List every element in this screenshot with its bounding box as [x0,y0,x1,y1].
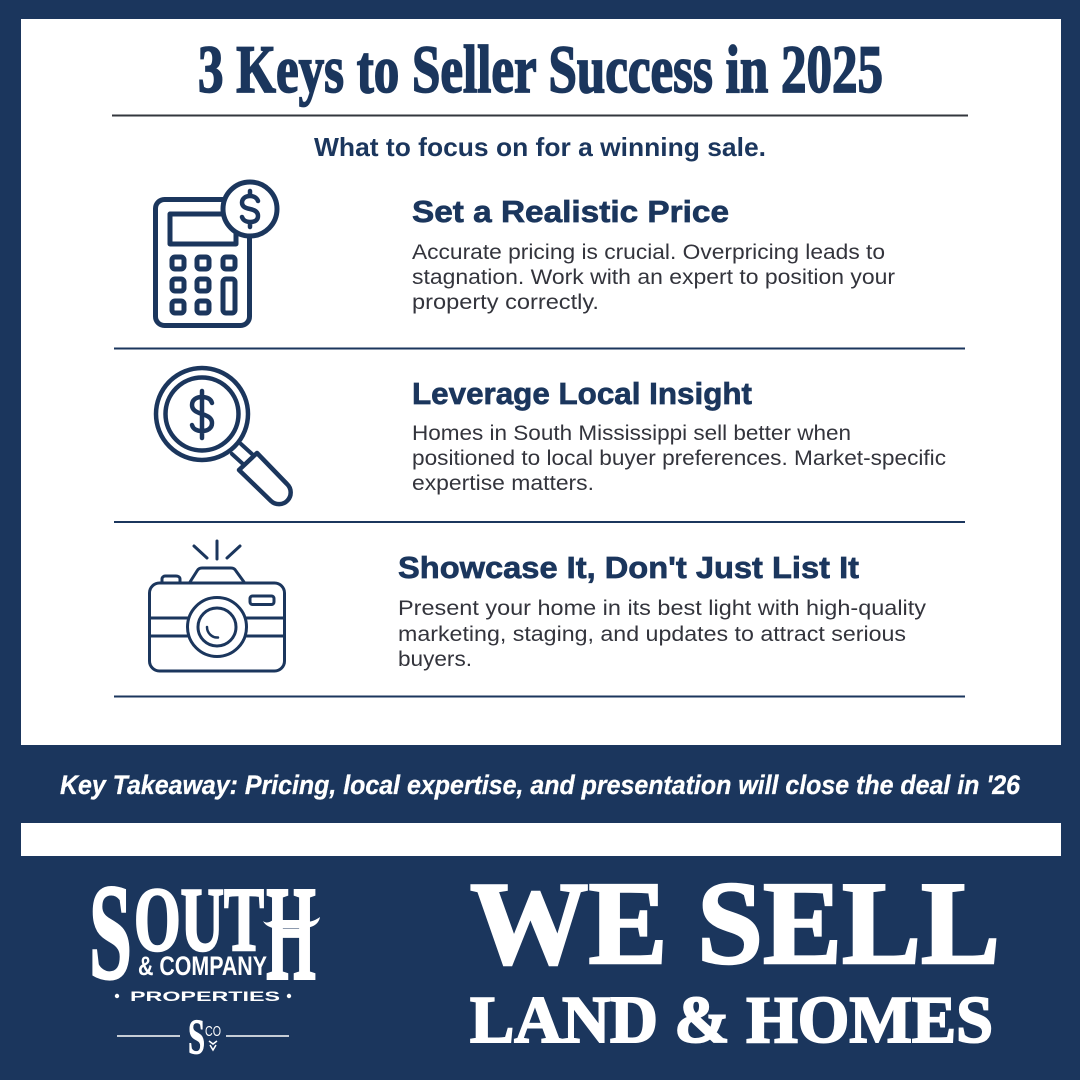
heading: leverage local insight: Leverage Local Insight [412,376,752,411]
icon: magnifier with dollar [156,368,291,504]
slogan: land and homes: LAND & HOMES [470,983,993,1057]
text block: showcase [398,596,926,671]
logo: South & Company Properties [89,856,320,1064]
text block: local insight: Homes in South Mississippi sell better when [412,421,851,445]
logo: South & Company Properties: OUT [134,869,264,970]
text block: showcase: buyers. [398,647,472,671]
text block: pricing [412,240,895,314]
text block: local insight: positioned to local buyer preferences. Market-specific [412,446,946,470]
text block: pricing: property correctly. [412,290,599,314]
text block: showcase: marketing, staging, and updates to attract serious [398,622,906,646]
icon: camera [150,541,284,671]
heading: showcase it: Showcase It, Don't Just List It [398,550,859,585]
logo: South & Company Properties: PROPERTIES [130,988,280,1004]
callout: key takeaway: Key Takeaway: Pricing, local expertise, and presentation will close the deal in '26 [60,770,1021,800]
white strip [21,823,1061,856]
subtitle: What to focus on for a winning sale. [314,132,766,162]
text block: pricing: Accurate pricing is crucial. Overpricing leads to [412,240,885,264]
text block: local insight [412,421,946,495]
logo: South & Company Properties: S [89,856,132,1008]
slogan: we sell: WE SELL [470,857,1000,989]
icon: calculator with dollar [156,182,277,326]
logo: South & Company Properties: & COMPANY [138,951,267,981]
heading: set a realistic price: Set a Realistic Price [412,194,729,229]
logo: South & Company Properties: H [266,859,316,1009]
logo: South & Company Properties: CO [205,1023,221,1040]
logo: South & Company Properties: S [188,1008,205,1064]
text block: local insight: expertise matters. [412,471,594,495]
panel: main content [21,19,1061,745]
text block: showcase: Present your home in its best light with high-quality [398,596,926,620]
text block: pricing: stagnation. Work with an expert to position your [412,265,895,289]
